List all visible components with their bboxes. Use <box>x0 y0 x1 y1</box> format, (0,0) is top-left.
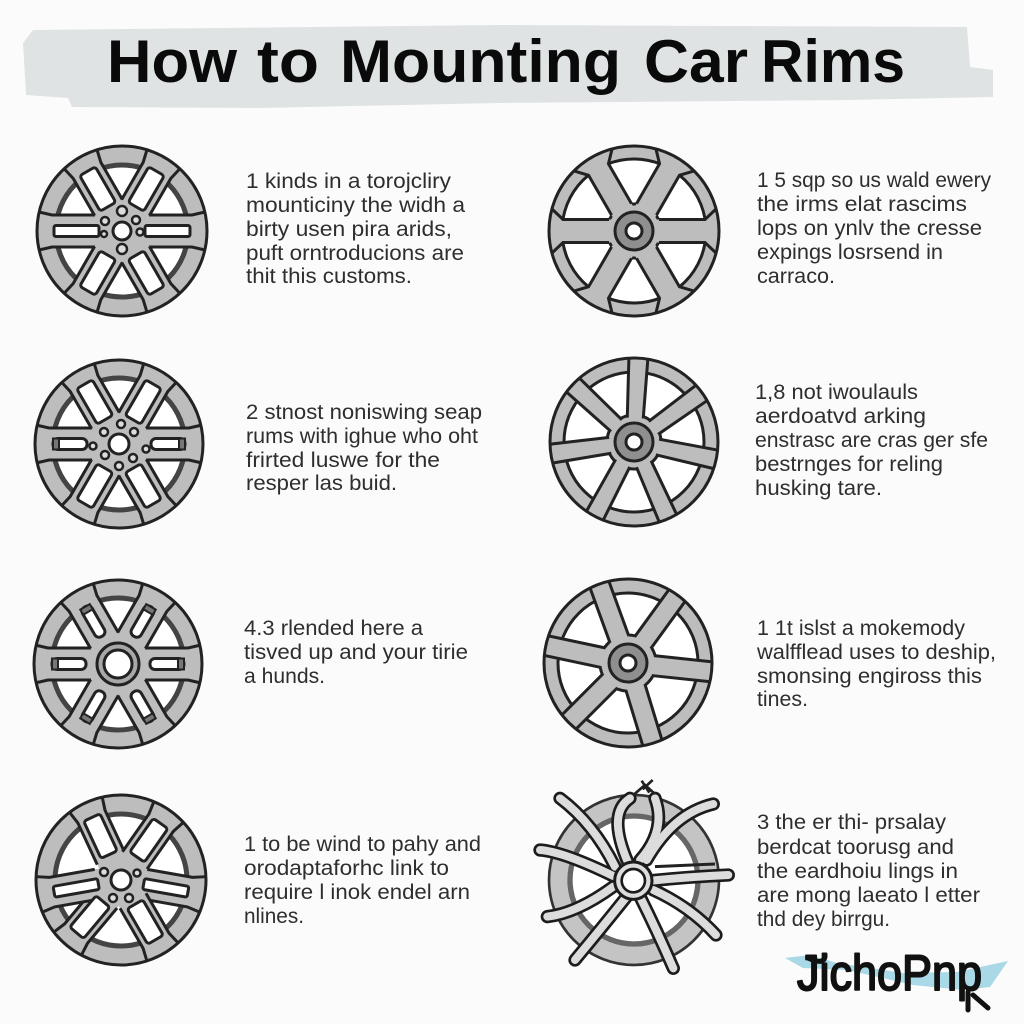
icon: split-spoke rim <box>35 360 203 528</box>
text block <box>246 170 465 288</box>
text block: rums with ighue who oht <box>246 425 478 448</box>
text block: nlines. <box>244 905 304 928</box>
text block: frirted luswe for the <box>246 449 440 472</box>
panel: step left 4 <box>36 795 481 965</box>
text block: enstrasc are cras ger sfe <box>755 429 988 452</box>
text block: aerdoatvd arking <box>755 405 926 428</box>
title banner: How <box>107 28 237 95</box>
text block: birty usen pira arids, <box>246 218 452 241</box>
panel: step left 1 <box>37 146 465 316</box>
title banner: to <box>257 28 319 95</box>
text block: lops on ynlv the cresse <box>757 217 982 240</box>
panel: step left 3 <box>34 580 468 748</box>
text block: resper las buid. <box>246 472 397 495</box>
text block: a hunds. <box>244 665 325 688</box>
text block <box>757 811 980 931</box>
text block: 1 kinds in a torojcliry <box>246 170 452 193</box>
title banner: Mounting <box>340 28 621 95</box>
text block: thit this customs. <box>246 265 412 288</box>
text block: the irms elat rascims <box>757 193 967 216</box>
text block: thd dey birrgu. <box>757 908 890 931</box>
title banner: Car <box>644 28 748 95</box>
text block: 1 to be wind to pahy and <box>244 833 481 856</box>
panel: step right 1 <box>549 146 991 316</box>
text block: walfflead uses to deship, <box>756 641 996 664</box>
text block: tines. <box>757 688 808 711</box>
text block: mounticiny the widh a <box>246 194 465 217</box>
text block: 2 stnost noniswing seap <box>246 401 482 424</box>
logo: JichoPnp <box>797 945 982 1001</box>
text block: husking tare. <box>755 477 882 500</box>
text block: 1 1t islst a mokemody <box>757 617 965 640</box>
text block <box>246 401 482 495</box>
panel: step right 3 <box>544 579 996 747</box>
panel: step right 4 <box>540 780 980 968</box>
panel: step right 2 <box>549 358 988 526</box>
text block <box>755 381 988 500</box>
icon: six-spoke rim <box>549 146 719 316</box>
text block: berdcat toorusg and <box>757 836 954 859</box>
text block: smonsing engiross this <box>757 665 982 688</box>
text block: are mong laeato l etter <box>757 884 980 907</box>
icon: six double-spoke rim <box>37 146 207 316</box>
panel: step left 2 <box>35 360 482 528</box>
icon: slotted-spoke rim with large hub <box>34 580 202 748</box>
text block: carraco. <box>757 265 835 288</box>
icon: seven-spoke rim <box>549 358 718 526</box>
text block: 1 5 sqp so us wald ewery <box>757 169 991 192</box>
icon: twin-spoke rim <box>36 795 206 965</box>
text block: expings losrsend in <box>757 241 943 264</box>
title banner <box>23 25 993 108</box>
text block: puft orntroducions are <box>246 242 464 265</box>
icon: tangled tentacle-spoke rim <box>540 780 728 968</box>
text block <box>244 833 481 928</box>
text block: require l inok endel arn <box>244 881 470 904</box>
text block: orodaptaforhc link to <box>244 857 449 880</box>
icon: angled six-spoke rim <box>544 579 713 747</box>
text block: the eardhoiu lings in <box>757 860 958 883</box>
text block: bestrnges for reling <box>755 453 943 476</box>
text block: 1,8 not iwoulauls <box>755 381 918 404</box>
text block: 4.3 rlended here a <box>244 617 423 640</box>
text block <box>756 617 996 711</box>
text block: 3 the er thi- prsalay <box>757 811 947 834</box>
text block: tisved up and your tirie <box>244 641 468 664</box>
text block <box>757 169 991 288</box>
text block <box>244 617 468 688</box>
title banner: Rims <box>761 28 905 95</box>
